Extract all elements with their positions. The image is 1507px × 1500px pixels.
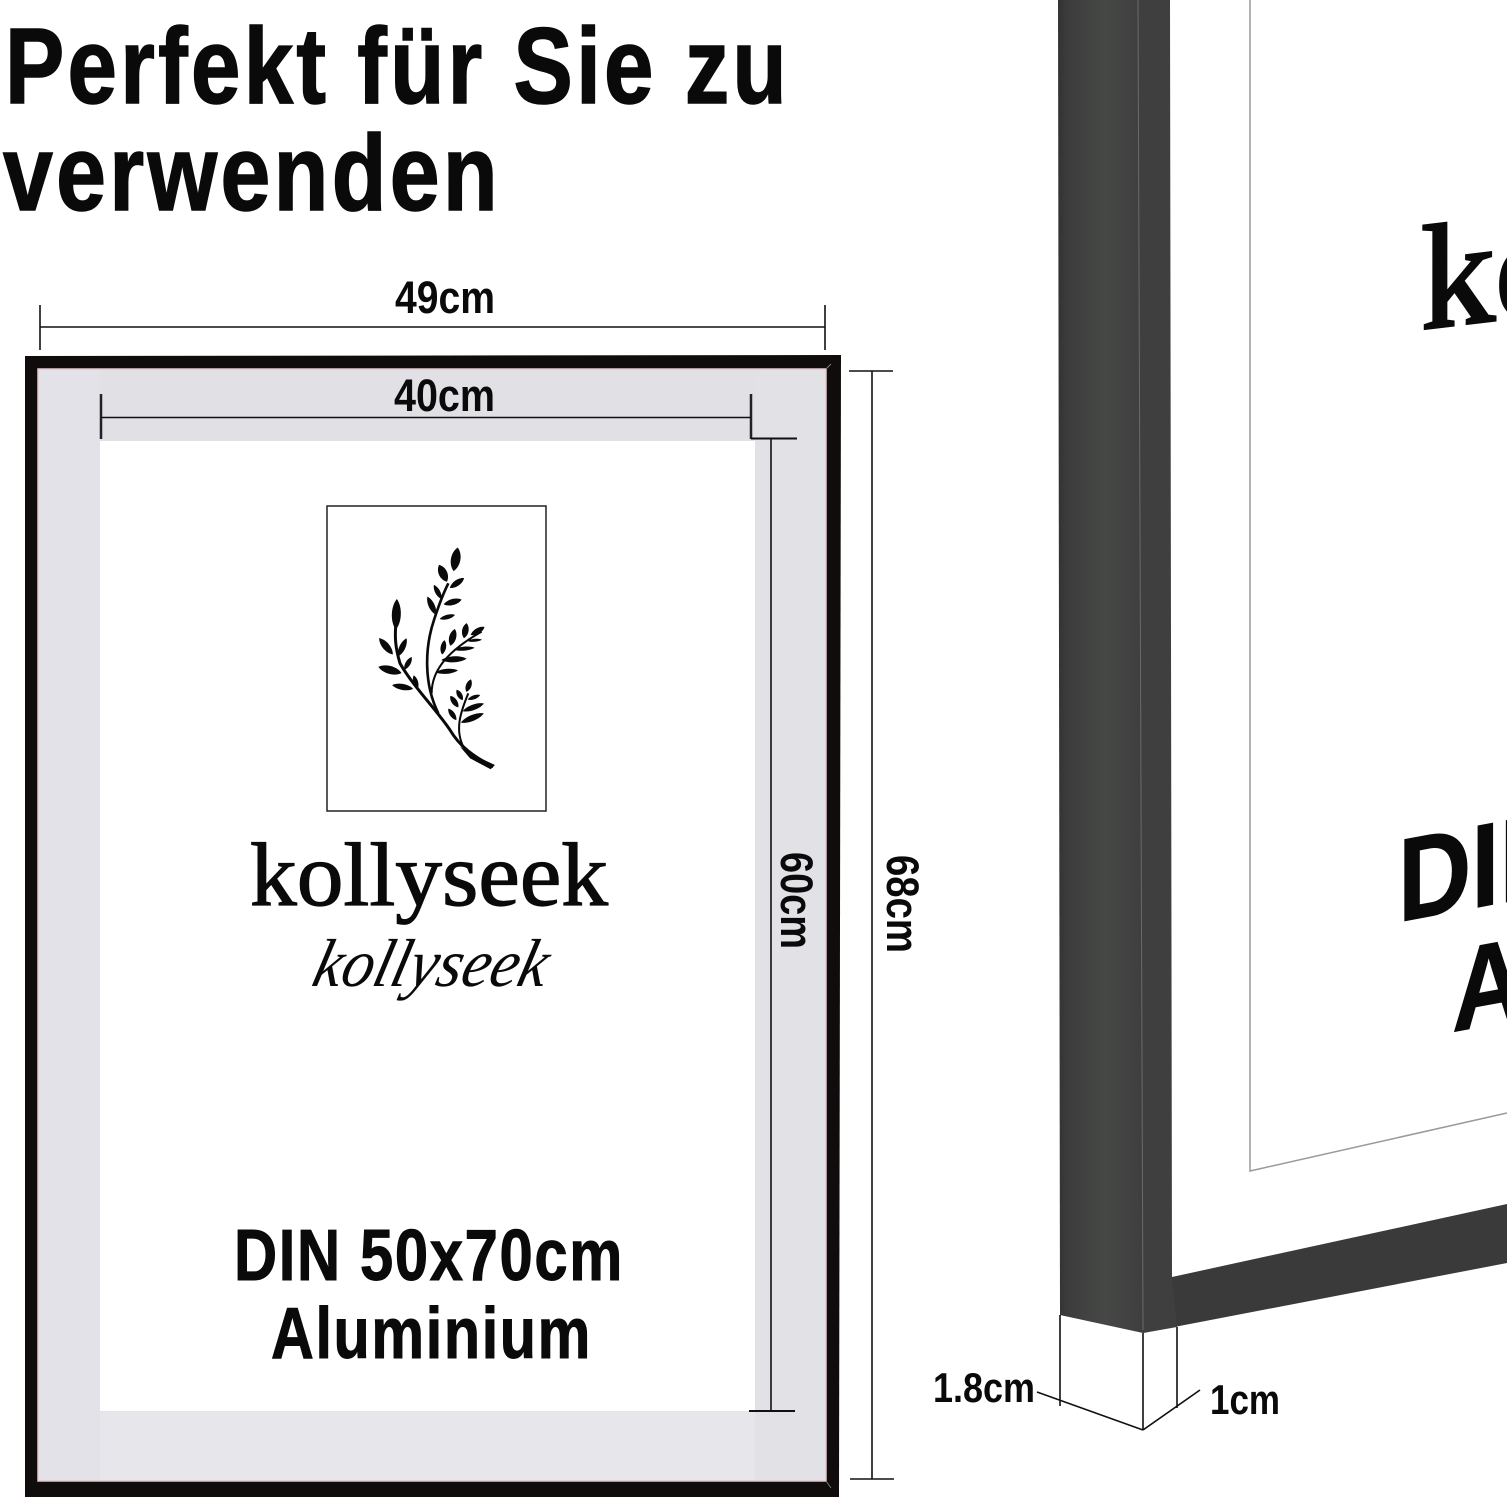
heading: Perfekt für Sie zu (5, 5, 790, 126)
heading (3, 5, 790, 233)
panel: perspective corner view of frame (933, 0, 1507, 1430)
corner bevel highlights (826, 364, 831, 1488)
material label: Aluminium (271, 1294, 592, 1374)
white picture window (100, 441, 755, 1411)
dimension: 49cm outer width: 49cm (395, 272, 495, 323)
dimension: 40cm inner width: 40cm (394, 370, 495, 421)
dimension: 1.8cm depth: 1.8cm (933, 1364, 1035, 1411)
panel: front view of frame with dimensions (25, 272, 928, 1497)
icon: leaf branch (376, 547, 495, 769)
right face of frame (1138, 0, 1177, 1333)
grey mat board (38, 369, 826, 1481)
dimension: 1.8cm depth (933, 1315, 1143, 1430)
dimension: 60cm inner height: 60cm (771, 852, 822, 949)
dimension: 68cm outer height: 68cm (877, 855, 928, 953)
dimension: 1cm width (1143, 1327, 1280, 1430)
size label: DIN 50x70cm (234, 1216, 624, 1296)
bottom rail of frame (1143, 1204, 1507, 1333)
brand name serif: kollyseek (250, 826, 608, 925)
poster outline (327, 506, 546, 811)
highlight edge (1138, 0, 1143, 1330)
dimension: 1cm width: 1cm (1210, 1376, 1280, 1423)
inner picture outline (1250, 0, 1507, 1171)
dimension: 40cm inner width (101, 370, 751, 439)
heading: verwenden (3, 112, 501, 233)
left face of frame (1058, 0, 1143, 1333)
dimension: 68cm outer height (849, 371, 928, 1479)
brand name script: kollyseek (306, 925, 559, 1001)
frame outer border (25, 355, 841, 1497)
dimension: 49cm outer width (40, 272, 825, 350)
dimension: 60cm inner height (749, 438, 822, 1411)
